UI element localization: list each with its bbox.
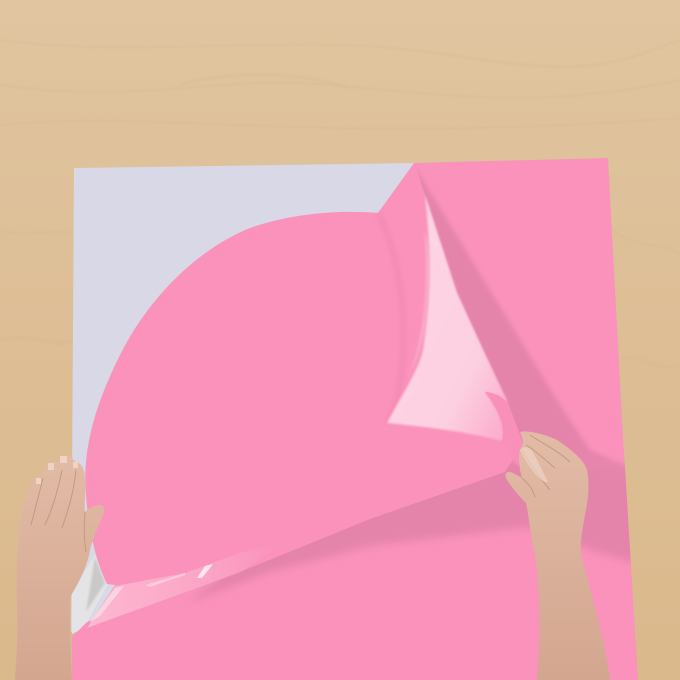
- shadow under right peeled flap: [418, 174, 628, 504]
- shadow under lower peeled flap: [190, 460, 640, 602]
- backing sheet: lavender grey: [71, 163, 420, 632]
- pink sheet: right and lower adhered vinyl: [72, 158, 638, 680]
- right hand holding peeled corner: [506, 431, 610, 680]
- left hand pressing sheet: [15, 456, 104, 680]
- backing sheet corner, pale where the vinyl has lifted: [72, 555, 108, 634]
- thumb highlight: [520, 447, 548, 482]
- finger gaps: [31, 470, 86, 552]
- crease line along the circle edge: [378, 213, 404, 423]
- pink tip of upper flap: [485, 392, 523, 467]
- glossy lower-left fold: [87, 540, 290, 628]
- pink circle shape and fold band: [85, 163, 523, 628]
- shadows cast by peeled flaps, clipped to the sheet: [190, 167, 640, 602]
- glossy reverse of upper flap: [387, 195, 508, 441]
- glare on lower-left fold: [90, 564, 213, 622]
- darker pink band beside the gloss: [410, 230, 430, 372]
- finger creases: [522, 435, 570, 497]
- fingernails: [36, 456, 78, 484]
